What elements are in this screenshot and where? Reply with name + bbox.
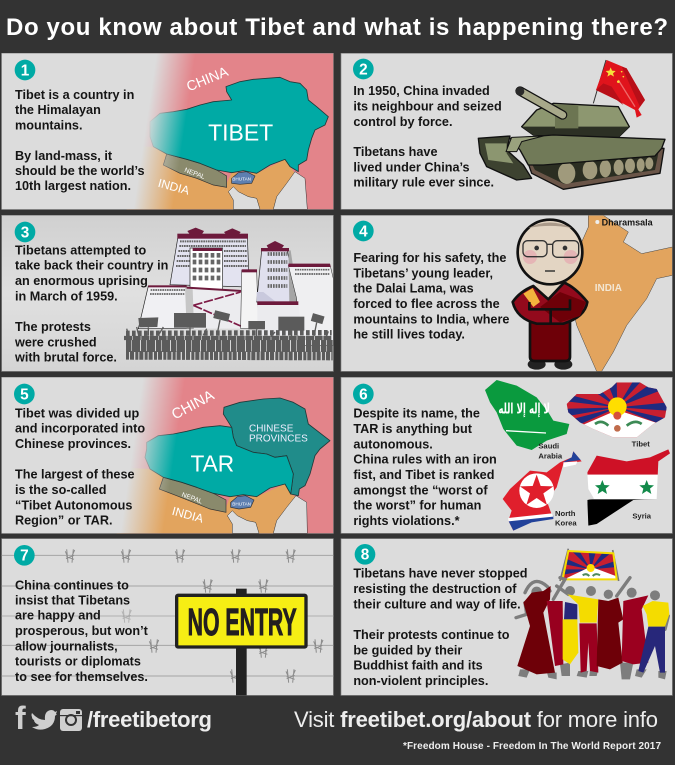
panel 7: no entry	[2, 539, 333, 695]
text: panel 5: The largest of these	[15, 468, 135, 482]
title: Do you know about Tibet and what is happening there?	[6, 14, 668, 41]
text: panel 3: were crushed	[14, 335, 97, 349]
text: panel 5: is the so-called	[15, 483, 106, 497]
text: panel 7: to see for themselves.	[15, 670, 148, 684]
illustration: protesters	[516, 578, 669, 679]
map flag: North Korea: Korea	[555, 519, 577, 528]
text: panel 1: By land-mass, it	[15, 149, 113, 163]
text: panel 1: the Himalayan	[15, 103, 101, 117]
illustration: Tibetan flag held aloft	[560, 549, 620, 581]
text: panel 4: the Dalai Lama, was	[353, 282, 474, 296]
map: India	[567, 215, 672, 371]
text: panel 6: autonomous.	[353, 437, 433, 451]
text: panel 3: Tibetans attempted to	[15, 243, 147, 257]
text: panel 3: with brutal force.	[14, 351, 117, 365]
text: panel 6: TAR is anything but	[353, 422, 473, 436]
text: panel 2: In 1950, China invaded	[353, 84, 490, 98]
map flag: Syria: Syria	[632, 512, 652, 521]
text: panel 6: China rules with an iron	[353, 453, 497, 467]
text: panel 6: amongst the “worst of	[353, 483, 488, 497]
text: panel 2: its neighbour and seized	[353, 100, 502, 114]
text: panel 2: lived under China’s	[353, 160, 470, 174]
icon: twitter	[32, 710, 57, 730]
map flag: Saudi Arabia	[485, 380, 569, 460]
label: Dharamsala: Dharamsala	[602, 217, 654, 227]
text: panel 3: take back their country in	[15, 259, 168, 273]
text: panel 6: Despite its name, the	[353, 407, 480, 421]
text: panel 7: tourists or diplomats	[15, 655, 141, 669]
text: panel 1: mountains.	[15, 118, 83, 132]
text: panel 4: forced to flee across the	[353, 297, 500, 311]
text: panel 2: control by force.	[353, 115, 452, 129]
map flag: North Korea	[503, 451, 582, 531]
number badge 4: 4	[359, 223, 368, 240]
text: panel 8: Their protests continue to	[353, 628, 510, 642]
text: panel 7: prosperous, but won’t	[15, 624, 149, 638]
number badge 1: 1	[21, 62, 30, 79]
label: Nepal: NEPAL	[181, 492, 203, 506]
map: Tibet location	[2, 53, 333, 209]
text: panel 1: 10th largest nation.	[15, 179, 131, 193]
footer: call to action: Visit freetibet.org/about for more info	[294, 707, 658, 732]
text: panel 3: in March of 1959.	[15, 289, 118, 303]
text: panel 3: The protests	[15, 320, 91, 334]
text: panel 2: Tibetans have	[353, 145, 438, 159]
label: Nepal: NEPAL	[183, 167, 206, 181]
number badge 8: 8	[361, 547, 370, 564]
map flag: Tibet: Tibet	[632, 439, 650, 448]
text: panel 4: Fearing for his safety, the	[353, 251, 506, 265]
label: Bhutan: BHUTAN	[232, 176, 251, 181]
panel 6: human rights	[341, 377, 672, 533]
label: China: CHINA	[184, 63, 231, 94]
map flag: Saudi Arabia: لا إله إلا الله	[498, 400, 550, 417]
map flag: Saudi Arabia: Arabia	[538, 451, 563, 460]
number badge 6	[353, 384, 374, 404]
number badge 6: 6	[359, 386, 368, 403]
text: panel 7: insist that Tibetans	[15, 594, 130, 608]
number badge 5	[14, 384, 35, 404]
panel 2: invasion	[341, 53, 672, 209]
label: India: INDIA	[170, 504, 205, 526]
text: panel 4: he still lives today.	[353, 328, 465, 342]
number badge 5: 5	[20, 386, 29, 403]
panel 8: resistance	[341, 539, 672, 695]
text: panel 4: mountains to India, where	[353, 312, 509, 326]
text: panel 7: China continues to	[15, 578, 129, 592]
label: India: INDIA	[595, 283, 622, 294]
map flag: Tibet	[566, 382, 667, 446]
text: panel 5: Region” or TAR.	[15, 514, 112, 528]
text: panel 1: should be the world’s	[15, 164, 145, 178]
footer: social icons	[15, 700, 82, 736]
panel 1: Tibet is a country	[2, 53, 333, 209]
label: India: INDIA	[156, 176, 191, 198]
text: panel 8: be guided by their	[353, 643, 462, 657]
text: panel 2: military rule ever since.	[353, 176, 494, 190]
text: panel 5: Tibet was divided up	[15, 406, 140, 420]
text: panel 1: Tibet is a country in	[15, 88, 134, 102]
text: panel 5: Chinese provinces.	[15, 437, 131, 451]
map flag: North Korea: North	[555, 509, 576, 518]
number badge 7	[14, 545, 35, 566]
text: panel 8: Tibetans have never stopped	[353, 567, 528, 581]
text: panel 5: “Tibet Autonomous	[15, 498, 132, 512]
text: panel 6: rights violations.*	[353, 514, 460, 528]
icon: Chinese flag	[593, 60, 645, 118]
map: TAR and Chinese provinces	[2, 377, 333, 533]
number badge 2	[353, 59, 374, 79]
label: Chinese provinces: PROVINCES	[249, 434, 308, 445]
text: panel 6: the worst” for human	[353, 499, 481, 513]
label: Chinese provinces: CHINESE	[249, 423, 294, 434]
panel 4: Dalai Lama	[341, 215, 672, 371]
text: panel 3: an enormous uprising	[15, 274, 148, 288]
icon: instagram	[60, 709, 82, 731]
map flag: Syria	[585, 447, 672, 527]
number badge 4	[353, 221, 374, 241]
label: China: CHINA	[169, 388, 217, 423]
number badge 3: 3	[21, 224, 29, 241]
text: panel 4: Tibetans’ young leader,	[353, 266, 493, 280]
illustration: Dalai Lama	[513, 220, 587, 370]
map flag: Saudi Arabia: Saudi	[538, 442, 559, 451]
footer: source note: *Freedom House - Freedom In The World Report 2017	[403, 741, 661, 752]
text: panel 7: are happy and	[15, 609, 101, 623]
label: Tibet: TIBET	[208, 120, 273, 146]
number badge 1	[15, 60, 35, 80]
number badge 8	[355, 544, 375, 565]
icon: facebook: f	[15, 700, 26, 736]
text: panel 7: allow journalists,	[15, 639, 118, 653]
number badge 7: 7	[20, 548, 29, 565]
text: panel 8: non-violent principles.	[353, 674, 488, 688]
number badge 2: 2	[359, 61, 368, 78]
text: panel 8: their culture and way of life.	[353, 597, 521, 611]
label: Bhutan: BHUTAN	[232, 501, 251, 506]
illustration: protesting crowd	[124, 310, 333, 356]
label: TAR: TAR	[191, 451, 234, 477]
panel 5: divided Tibet	[2, 377, 333, 533]
footer: social handle: /freetibetorg	[87, 707, 212, 732]
no entry sign	[177, 589, 306, 695]
icon: tank	[478, 87, 665, 189]
text: panel 8: Buddhist faith and its	[353, 659, 483, 673]
number badge 3	[15, 222, 35, 242]
illustration: Potala Palace	[138, 228, 333, 345]
text: panel 6: fist, and Tibet is ranked	[353, 468, 494, 482]
barbed wire	[2, 549, 333, 683]
text: panel 5: and incorporated into	[15, 422, 145, 436]
text: panel 8: resisting the destruction of	[353, 582, 517, 596]
panel 3: uprising	[2, 215, 333, 371]
no entry sign: NO ENTRY	[188, 601, 297, 643]
